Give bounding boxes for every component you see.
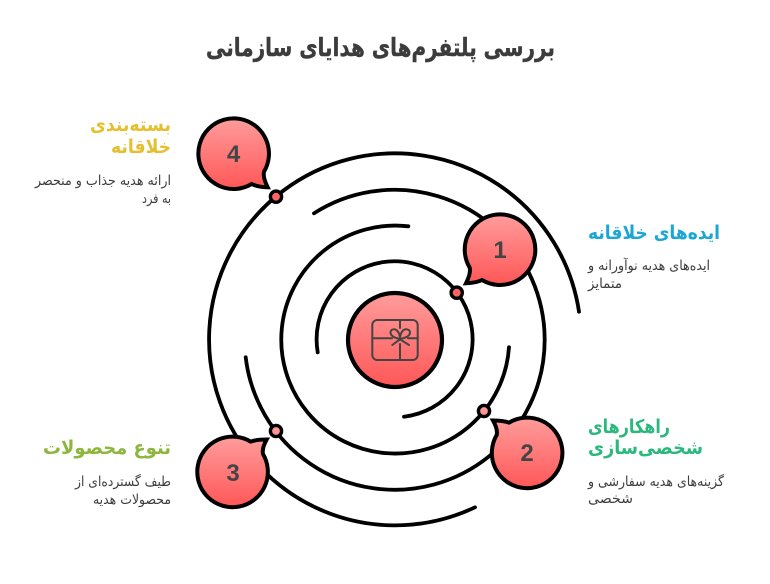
text: creative ideas description: ایده‌های هدیه نوآورانه و — [587, 257, 710, 274]
panel: creative ideas — [587, 222, 720, 292]
step 4 bubble: 4 — [227, 141, 241, 168]
text: product variety description: محصولات هدیه — [93, 492, 171, 508]
connector dots — [270, 191, 490, 437]
icon: gift — [372, 320, 418, 360]
heading: personalization — [588, 416, 703, 459]
heading: creative ideas: ایده‌های خلاقانه — [588, 222, 720, 244]
text: creative packaging description — [34, 173, 171, 207]
text: personalization description: شخصی — [588, 491, 633, 507]
heading: product variety: تنوع محصولات — [43, 437, 171, 459]
text: creative packaging description: ارائه هدیه جذاب و منحصر — [34, 173, 171, 189]
step 3 bubble — [197, 437, 268, 507]
step 1 bubble — [465, 214, 535, 285]
text: creative ideas description — [587, 257, 710, 292]
step 2 bubble: 2 — [520, 440, 534, 467]
heading: personalization: شخصی‌سازی — [588, 437, 703, 459]
panel: creative packaging — [34, 114, 171, 207]
step 3 bubble: 3 — [226, 460, 240, 487]
panel: product variety — [43, 437, 171, 508]
text: creative packaging description: به فرد — [142, 191, 171, 207]
text: product variety description: طیف گسترده‌ای از — [74, 473, 171, 490]
text: creative ideas description: متمایز — [587, 276, 622, 292]
text: personalization description: گزینه‌های هدیه سفارشی و — [587, 473, 725, 490]
heading: creative packaging: بسته‌بندی — [90, 114, 171, 136]
step 4 bubble — [198, 118, 269, 189]
center circle with gift icon — [348, 293, 442, 387]
text: product variety description — [74, 473, 171, 508]
orbit rings — [209, 153, 579, 525]
heading: creative packaging — [90, 114, 171, 158]
step 2 bubble — [492, 418, 562, 488]
heading: personalization: راهکارهای — [588, 416, 670, 438]
title: بررسی پلتفرم‌های هدایای سازمانی — [206, 33, 555, 63]
text: personalization description — [587, 473, 725, 507]
step 1 bubble: 1 — [493, 237, 507, 264]
heading: creative packaging: خلاقانه — [111, 136, 171, 158]
panel: personalization — [587, 416, 725, 507]
